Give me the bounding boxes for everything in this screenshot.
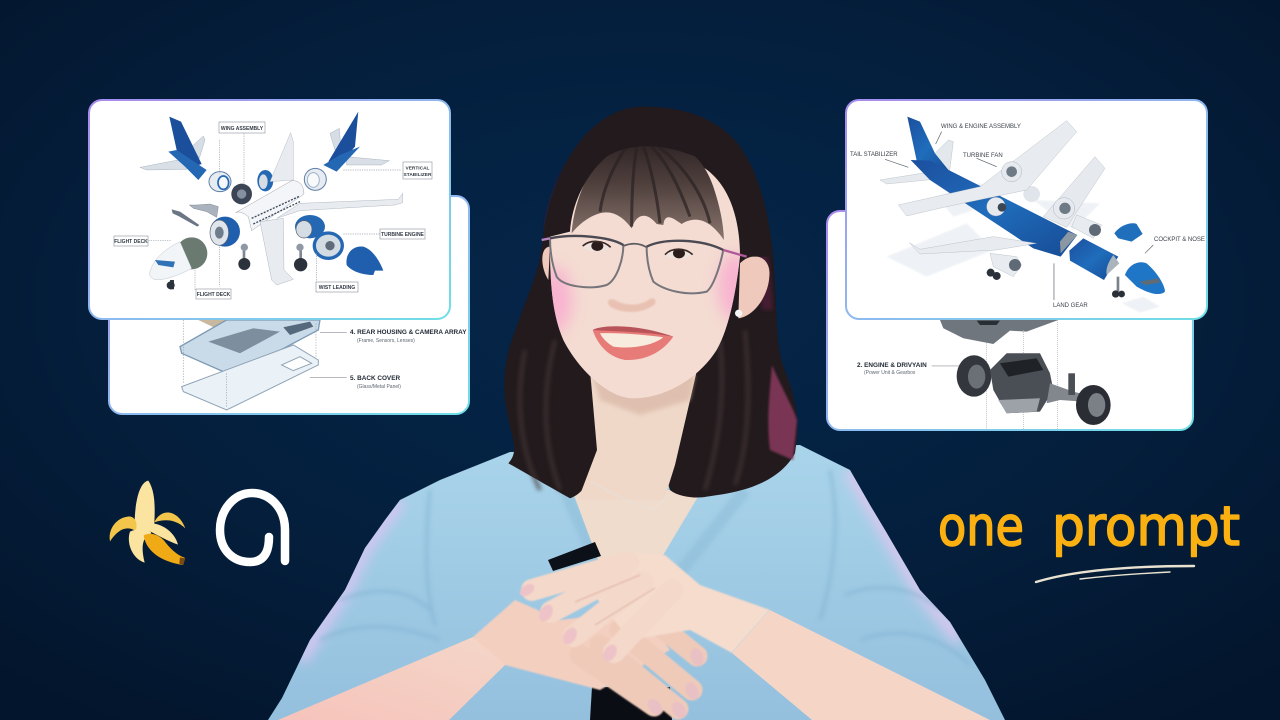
label: turbine engine	[380, 229, 425, 239]
label: turbine engine: TURBINE ENGINE	[381, 232, 425, 238]
phone exploded illustration	[180, 320, 347, 410]
nose	[608, 298, 656, 312]
label: vertical stabilizer	[403, 162, 432, 179]
label: engine and drivetrain: 2. ENGINE & DRIVYAIN	[857, 362, 927, 369]
hair tint left	[545, 150, 580, 230]
mouth	[593, 326, 673, 360]
upper hand	[518, 552, 770, 664]
person	[268, 107, 1005, 720]
label: wist leading: WIST LEADING	[319, 285, 355, 291]
panel: exploded airplane card (front left)	[89, 100, 450, 319]
blue airplane illustration	[880, 117, 1165, 313]
label: wist leading	[316, 282, 358, 292]
label: back cover: 5. BACK COVER	[350, 375, 400, 382]
hair strands	[520, 330, 748, 490]
label: wing and engine assembly: WING & ENGINE ASSEMBLY	[941, 124, 1021, 130]
label: power unit detail: (Power Unit & Gearbox	[864, 370, 916, 376]
label: wing assembly: WING ASSEMBLY	[221, 126, 264, 132]
sweater	[268, 445, 1005, 720]
right eye	[665, 248, 693, 259]
bangs strands	[600, 147, 710, 227]
icon: peeled banana	[110, 481, 185, 565]
icon: letter a logo	[220, 493, 285, 562]
label: rear housing detail: (Frame, Sensors, Lenses)	[357, 338, 415, 344]
back hair	[504, 107, 797, 498]
microphone	[548, 542, 601, 571]
panel: phone diagram card (back left)	[109, 196, 469, 414]
face	[550, 163, 740, 398]
label: rear housing: 4. REAR HOUSING & CAMERA ARRAY	[350, 329, 467, 336]
heading: one prompt: prompt	[1052, 495, 1240, 558]
label: flight deck upper	[114, 236, 148, 246]
label: flight deck lower: FLIGHT DECK	[197, 292, 231, 298]
lower hand	[473, 600, 706, 720]
neck	[578, 370, 697, 500]
panel: car diagram card (back right)	[827, 211, 1193, 430]
label: back cover detail: (Glass/Metal Panel)	[357, 384, 401, 390]
necklace	[592, 482, 668, 510]
left ear sliver	[542, 247, 550, 280]
face group	[538, 107, 772, 398]
label: wing assembly	[219, 122, 265, 133]
ear	[738, 256, 770, 318]
hair tint right lower	[768, 365, 797, 460]
hair tint right upper	[748, 175, 773, 310]
left eye	[583, 241, 611, 251]
arm left	[278, 637, 515, 720]
heading: one prompt: one	[938, 495, 1024, 558]
cheeks	[538, 253, 752, 333]
panel: blue airplane card (front right)	[846, 100, 1207, 319]
arm right	[732, 610, 990, 720]
chalk underline	[1036, 566, 1194, 582]
label: tail stabilizer: TAIL STABILIZER	[850, 152, 898, 158]
glasses	[542, 236, 747, 293]
bangs	[572, 136, 724, 240]
label: vertical stabilizer: VERTICAL	[406, 166, 430, 172]
label: vertical stabilizer: STABILIZER	[404, 172, 432, 178]
neck shadow	[592, 375, 695, 415]
label: land gear: LAND GEAR	[1053, 303, 1088, 309]
label: flight deck lower	[196, 289, 231, 299]
label: flight deck upper: FLIGHT DECK	[114, 239, 148, 245]
car and drivetrain illustration	[932, 320, 1111, 430]
dark garment below hands	[590, 687, 672, 720]
heading: one prompt	[938, 495, 1240, 558]
label: cockpit and nose: COCKPIT & NOSE	[1154, 237, 1205, 243]
earring	[735, 310, 742, 317]
exploded airplane illustration	[140, 112, 403, 290]
chest	[572, 490, 702, 585]
crown hair	[543, 107, 772, 257]
label: turbine fan: TURBINE FAN	[963, 153, 1003, 159]
